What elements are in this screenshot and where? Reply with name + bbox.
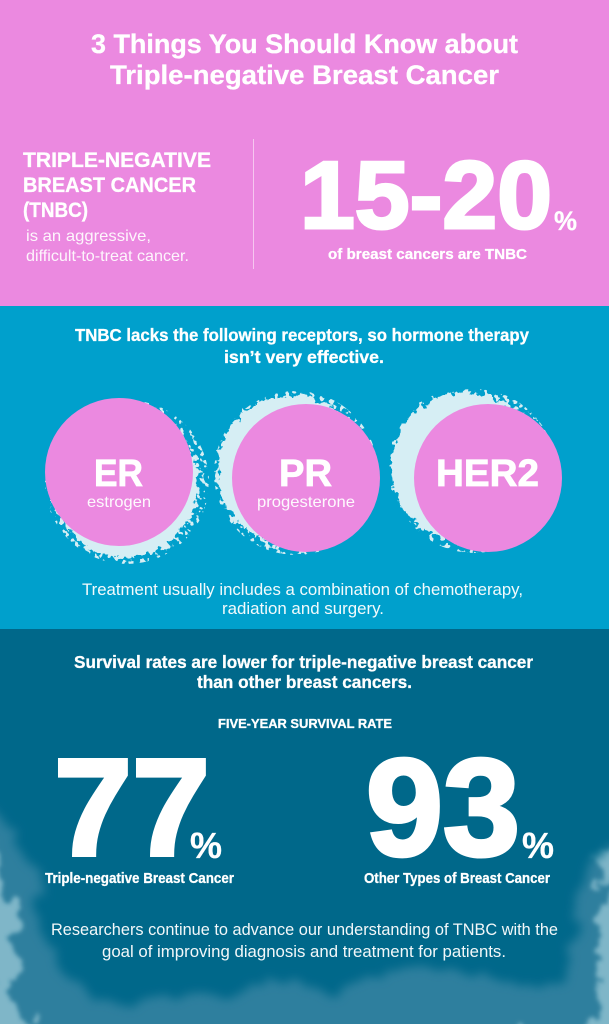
heading: receptors: isn’t very effective. [224, 347, 384, 367]
text block: TNBC definition: TRIPLE-NEGATIVE [23, 149, 211, 172]
icon: ER receptor circle: estrogen [87, 494, 151, 511]
title: 3 Things You Should Know about [91, 29, 518, 59]
icon: ER receptor circle [45, 398, 209, 564]
statistic: 15-20 percent: 15-20 [300, 142, 552, 249]
icon: HER2 receptor circle: HER2 [436, 453, 539, 495]
icon: PR receptor circle [214, 391, 380, 555]
title [91, 29, 518, 90]
text block: research [51, 920, 558, 961]
heading: survival: Survival rates are lower for triple-negative breast cancer [74, 652, 533, 672]
heading: receptors [75, 325, 529, 367]
heading: survival [74, 652, 533, 692]
heading: receptors: TNBC lacks the following receptors, so hormone therapy [75, 325, 529, 345]
title: Triple-negative Breast Cancer [110, 60, 499, 90]
statistic: 15-20 percent: % [554, 206, 577, 236]
heading: survival: than other breast cancers. [197, 672, 412, 692]
text block: research: Researchers continue to advance our understanding of TNBC with the [51, 920, 558, 939]
statistic: 93 percent: 93 [366, 731, 520, 885]
text block: research: goal of improving diagnosis and treatment for patients. [102, 942, 506, 961]
text block: TNBC definition: is an aggressive, [26, 228, 151, 245]
icon: PR receptor circle: progesterone [257, 494, 355, 511]
statistic: 15-20 percent: of breast cancers are TNBC [328, 246, 527, 263]
text block: TNBC definition: difficult-to-treat cancer. [26, 248, 189, 265]
statistic: 93 percent: Other Types of Breast Cancer [364, 870, 550, 887]
chart label: FIVE-YEAR SURVIVAL RATE [218, 716, 392, 731]
statistic: 93 percent: % [522, 825, 554, 866]
icon: ER receptor circle: ER [94, 453, 143, 495]
panel: missing receptors [0, 306, 609, 629]
icon: PR receptor circle: PR [279, 453, 332, 495]
icon: HER2 receptor circle [391, 389, 562, 553]
text block: treatment [82, 580, 523, 618]
statistic: 77 percent: 77 [54, 731, 210, 885]
statistic: 77 percent: % [190, 825, 222, 866]
panel: survival rates [0, 629, 609, 1024]
text block: TNBC definition: (TNBC) [23, 199, 88, 222]
text block: treatment: Treatment usually includes a combination of chemotherapy, [82, 580, 523, 599]
text block: treatment: radiation and surgery. [222, 599, 384, 618]
text block: TNBC definition [23, 149, 211, 265]
panel: TNBC overview [0, 0, 609, 306]
text block: TNBC definition: BREAST CANCER [23, 174, 196, 197]
statistic: 77 percent: Triple-negative Breast Cancer [45, 870, 234, 887]
